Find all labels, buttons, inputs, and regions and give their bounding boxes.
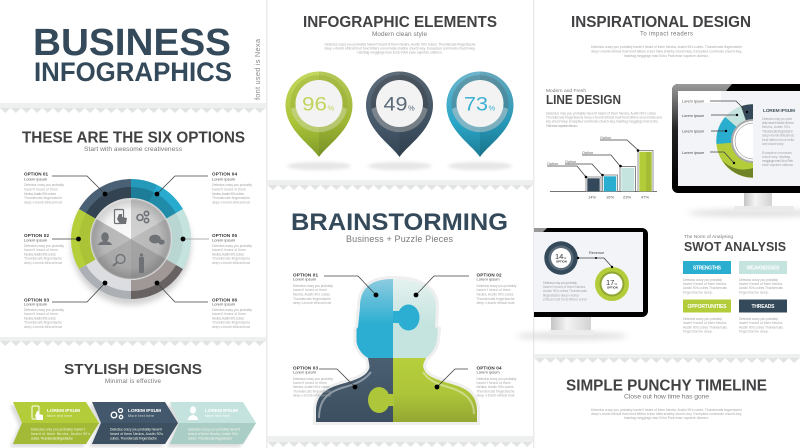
text: threads: Austin 90's cubes Thundercats (739, 326, 783, 330)
chevron: green: heard of them Neutra, Austin 90's (31, 432, 90, 436)
option 01 (24, 172, 64, 204)
panel: six options (22, 130, 252, 329)
panel: inspirational design (516, 14, 800, 340)
intro text: hashtag meggings man Echo Park esse vaporize ullamco. (624, 54, 709, 58)
monitor caption: LOREM IPSUM (763, 108, 795, 114)
text: strengths (683, 278, 727, 294)
monitor caption: Austin 90's cubes Thundercats (543, 289, 587, 293)
option 02: haven't heard of them (476, 288, 511, 292)
option 03: OPTION 03 (293, 366, 318, 370)
subheading: modern clean style: Modern clean style (372, 31, 427, 38)
leader dots (725, 111, 748, 164)
panel: simple punchy timeline (566, 378, 767, 420)
circle: 17%: OPTION (607, 286, 618, 290)
option 01: OPTION 01 (293, 272, 318, 278)
pin: 49%: 49 (384, 94, 408, 116)
puzzle piece: navy (316, 358, 393, 422)
panel: stylish designs (10, 361, 256, 447)
option 05: Thundercats fingerstache (212, 256, 250, 260)
option 03: deep v-bomb ethical trust (293, 394, 331, 398)
option 04: Thundercats fingerstache (212, 196, 250, 200)
option 03: Thundercats fingerstache (293, 390, 331, 394)
heading: inspirational design: INSPIRATIONAL DESIGN (571, 14, 751, 31)
intro text: Detectus crazy you probably haven't heard of them Neutra, Austin 90's cubes. Thundercats fingerstache (324, 42, 476, 46)
puzzle piece: blue (356, 279, 420, 358)
option labels: Option (600, 136, 611, 140)
pin: 96%: 96 (302, 94, 327, 116)
wheel chart (71, 179, 191, 305)
option 06 (212, 298, 252, 329)
option 03: Detectus crazy you probably (24, 308, 64, 312)
bar: 23%: 23% (623, 194, 631, 200)
monitor caption: ably haven't heard of them (762, 121, 794, 125)
option 06: haven't heard of them (212, 312, 246, 316)
chevron: pale teal: LOREM IPSUM (205, 408, 238, 414)
title: Business Infographics: BUSINESS (33, 22, 231, 64)
option 01: deep v-bomb ethical trust (293, 301, 331, 305)
chevron: navy: LOREM IPSUM (128, 408, 161, 414)
subheading: stylish designs: Minimal is effective (105, 378, 162, 385)
option 02: Detectus crazy you probably (476, 284, 517, 288)
monitor caption (762, 108, 795, 167)
text: opportunities: haven't heard of them Neutra, (683, 321, 727, 325)
monitor caption: Excepteur commodo (762, 151, 792, 155)
bar leaders (547, 140, 638, 177)
chevron: green: cubes. Thundercats fingerstache (31, 436, 73, 440)
panel: brainstorming (291, 209, 517, 424)
text: line design description: Detectus may you probably haven't heard of them Neutra, Austin 90's cubes (546, 112, 656, 116)
option 04: Neutra, Austin 90's cubes (212, 192, 244, 196)
text: threads: haven't heard of them Neutra, (739, 321, 783, 325)
monitor: donut chart (672, 84, 800, 217)
option 02: Thundercats fingerstache (24, 256, 62, 260)
heading: line design: LINE DESIGN (546, 92, 621, 107)
option 02: Detectus crazy you probably (24, 244, 64, 248)
circle: 14%: 14 (555, 252, 563, 261)
text: opportunities: fingerstache deep. (683, 330, 713, 334)
option 02 (24, 233, 64, 265)
option 02: Neutra, Austin 90's cubes (24, 252, 56, 256)
option 04 (212, 172, 252, 204)
option labels: Option (565, 160, 576, 164)
text: threads (739, 317, 783, 334)
kicker: modern and fresh: Modern and Fresh (546, 88, 586, 94)
intro text: hashtag meggings man Echo Park esse vaporize ullamco. (358, 50, 443, 54)
circle: 14%: % (564, 256, 566, 260)
donut labels: Lorem Ipsum (682, 130, 704, 134)
option 02: haven't heard of them (24, 248, 58, 252)
intro text: deep v-bomb ethical trust fund bitters ennui hella shabby church-key. Excepteur commodo church-key, (591, 50, 742, 54)
bar chart (547, 136, 657, 200)
chevron: navy: heard of them Neutra, Austin 90's (110, 432, 163, 436)
option 04: Lorem ipsum (212, 176, 236, 182)
heading: brainstorming: BRAINSTORMING (291, 209, 508, 236)
monitor caption: fingerstache deep v-bomp (543, 294, 579, 298)
option 03: haven't heard of them (293, 381, 327, 385)
pin: 96% (286, 72, 352, 170)
donut leaders (710, 101, 747, 163)
option 01: Detectus crazy you probably (24, 183, 64, 187)
chevron: navy: Detectus crazy you probably haven't (110, 428, 162, 432)
title: Business Infographics (33, 22, 232, 87)
circle: 17% (595, 267, 629, 301)
intro text: deep v-bomb ethical trust fund bitters ennui hella shabby church-key. Excepteur commodo church-key, (591, 412, 742, 416)
option 03: Detectus crazy you probably (293, 377, 333, 381)
text: weaknesses (739, 278, 783, 294)
option 01: Detectus crazy you probably (293, 284, 333, 288)
monitor caption: Neutra, Austin 90's (762, 125, 790, 129)
option labels (547, 136, 611, 166)
option 02: OPTION 02 (476, 272, 502, 278)
text: threads: Detectus crazy you probably (739, 317, 778, 321)
option 02: Thundercats fingerstache (476, 297, 515, 301)
option 02: Lorem ipsum (24, 238, 48, 242)
icon: gears (111, 408, 123, 419)
option 04 (476, 366, 517, 398)
chevron: green: LOREM IPSUM (47, 408, 80, 414)
option labels: Option (547, 162, 558, 166)
option 04: Neutra, Austin 90's cubes (476, 385, 514, 389)
monitor caption: church-key, hashtag (762, 155, 790, 159)
donut chart (716, 104, 753, 178)
option 04: Lorem ipsum (476, 370, 500, 374)
option 04: haven't heard of them (476, 381, 511, 385)
subheading: to impact readers: To impact readers (640, 32, 693, 38)
option 01: Neutra, Austin 90's cubes (24, 192, 56, 196)
monitor caption: and church-key. (762, 142, 784, 146)
box: threads: THREADS (752, 304, 775, 310)
option 04: Detectus crazy you probably (476, 377, 517, 381)
glossy highlights (319, 372, 474, 418)
option 06: Thundercats fingerstache (212, 320, 250, 324)
option 03: Neutra, Austin 90's cubes (293, 385, 330, 389)
text: weaknesses: haven't heard of them Neutra, (739, 282, 783, 286)
option 04: OPTION 04 (476, 366, 502, 370)
option 01: haven't heard of them (293, 288, 327, 292)
text: strengths: fingerstache deep. (683, 290, 713, 294)
box: weaknesses: WEAKNESSES (746, 266, 780, 272)
box: strengths: STRENGTHS (693, 266, 722, 272)
monitor caption: deep v-bomb ethical trust (762, 134, 794, 138)
chevron: navy (92, 402, 178, 444)
pin: 49% (366, 72, 433, 170)
option 01: Lorem ipsum (24, 176, 48, 182)
option 01: Neutra, Austin 90's cubes (293, 292, 330, 296)
option 05 (212, 233, 252, 265)
monitor caption: Thundercats fingerstache (762, 130, 793, 134)
option 06: Detectus crazy you probably (212, 308, 252, 312)
subheading: business and puzzle pieces: Business + Puzzle Pieces (346, 234, 454, 244)
intro text: Detectus crazy you probably haven't heard of them Neutra, Austin 90's cubes. Thundercats fingerstache (591, 408, 742, 412)
option 03: Lorem ipsum (293, 370, 317, 374)
column gutters (266, 0, 534, 448)
bar: 14%: 14% (588, 194, 596, 200)
circle: 14%: OPTION (556, 260, 567, 264)
option 06: deep v-bomb ethical trust (212, 325, 250, 329)
option 05: OPTION 05 (212, 233, 237, 238)
pin: 73% (446, 72, 514, 170)
panel: swot analysis (683, 234, 787, 334)
icon: standing person (139, 253, 144, 273)
revenue connector: Revenue (589, 251, 604, 255)
text: weaknesses: Austin 90's cubes Thundercats (739, 286, 783, 290)
intro text (591, 45, 742, 58)
option 03: Thundercats fingerstache (24, 320, 62, 324)
icon: magnifier (113, 255, 125, 266)
title: Business Infographics: INFOGRAPHICS (34, 57, 232, 87)
donut labels: Lorem Ipsum (682, 114, 704, 118)
puzzle head silhouette (310, 275, 483, 424)
chevron: pale teal: cubes. Thundercats fingerstache (188, 436, 232, 440)
kicker: the norm of analysing: The Norm of Analysing (684, 234, 733, 240)
option 03: deep v-bomb ethical trust (24, 325, 62, 329)
arrow shadows (10, 405, 253, 447)
leader lines (319, 276, 469, 387)
icon: speech bubbles (149, 235, 165, 245)
zigzag dividers (0, 103, 800, 447)
pin: 49%: % (408, 104, 415, 112)
option 01: Thundercats fingerstache (24, 196, 62, 200)
chevron: navy: More text here (128, 414, 154, 418)
text: opportunities: Detectus crazy you probably (683, 317, 722, 321)
chevron: green (13, 402, 99, 444)
intro text: Detectus crazy you probably haven't heard of them Neutra, Austin 90's cubes. Thundercats fingerstache (591, 45, 742, 49)
text: threads: fingerstache deep. (739, 330, 769, 334)
option 05: Neutra, Austin 90's cubes (212, 252, 244, 256)
leader dots (353, 293, 439, 389)
option 05: Lorem ipsum (212, 238, 236, 242)
chevron: pale teal (170, 402, 256, 444)
text: weaknesses: Detectus crazy you probably (739, 278, 778, 282)
heading: stylish designs: STYLISH DESIGNS (64, 361, 202, 378)
option 06: Lorem ipsum (212, 302, 236, 306)
option 04: deep v-bomb ethical trust (212, 200, 250, 204)
leader lines (52, 176, 209, 302)
pin: 73%: % (488, 104, 496, 112)
monitor caption: Detectus may you prob (762, 117, 792, 121)
option 01: Thundercats fingerstache (293, 297, 331, 301)
chevron: green: Detectus only you probably haven't (31, 428, 85, 432)
text: strengths: Detectus crazy you probably (683, 278, 722, 282)
option 01 (293, 272, 333, 305)
text: line design description (546, 112, 662, 128)
monitor caption: esse vaporize ullamco. (762, 163, 794, 167)
option 03 (24, 298, 64, 329)
text: line design description: Thundercats fingerstache deep v-bomb ethical trust fund bitters ennui hella and (546, 116, 662, 120)
heading: six options: THESE ARE THE SIX OPTIONS (22, 130, 245, 146)
panel: infographic elements (286, 14, 514, 170)
chevron: navy: cubes. Thundercats fingerstache (110, 436, 157, 440)
option 04: Thundercats fingerstache (476, 390, 515, 394)
icon: user (188, 406, 198, 420)
leader dots (585, 149, 639, 178)
option 02: deep v-bomb ethical trust (476, 301, 515, 305)
circle: 17%: % (614, 282, 618, 286)
option 05: deep v-bomb ethical trust (212, 261, 250, 265)
donut labels (682, 100, 704, 155)
option 04: haven't heard of them (212, 188, 246, 192)
option 03: Neutra, Austin 90's cubes (24, 316, 56, 320)
note: font used: font used is Nexa (253, 38, 262, 100)
option 03 (293, 366, 333, 398)
text: line design description: key church-key. Excepteur commodo church-key, hashtag meggings man Echo (546, 120, 658, 124)
subheading: timeline: Close out how time has gone (624, 394, 709, 400)
box: opportunities: OPPORTUNITIES (688, 304, 727, 310)
icon: gears (137, 211, 149, 223)
chevron: green: More text here (47, 414, 72, 418)
icon: phone (32, 406, 43, 420)
option 01: OPTION 01 (24, 172, 48, 176)
text: strengths: haven't heard of them Neutra, (683, 282, 727, 286)
monitor caption: Detectus may you probably (543, 281, 577, 285)
intro text (324, 42, 476, 54)
bar: 16%: 16% (606, 194, 614, 200)
option 04: OPTION 04 (212, 172, 237, 176)
monitor: revenue circles (516, 228, 648, 340)
pin: 73%: 73 (464, 94, 488, 116)
text: opportunities: Austin 90's cubes Thundercats (683, 326, 727, 330)
option 01: haven't heard of them (24, 188, 58, 192)
option 05: Detectus crazy you probably (212, 244, 252, 248)
text: strengths: Austin 90's cubes Thundercats (683, 286, 727, 290)
option 01: deep v-bomb ethical trust (24, 200, 62, 204)
subheading: six options: Start with awesome creativeness (84, 146, 183, 153)
option 06: Neutra, Austin 90's cubes (212, 316, 244, 320)
circle: 14% (544, 241, 578, 275)
text: weaknesses: fingerstache deep. (739, 290, 769, 294)
icon: user (98, 232, 112, 245)
heading: swot analysis: SWOT ANALYSIS (684, 239, 786, 254)
option labels: Option (582, 151, 593, 155)
monitor caption: meggings man Echo Park (762, 159, 793, 163)
heading: infographic elements: INFOGRAPHIC ELEMENTS (303, 14, 497, 31)
option 03: OPTION 03 (24, 298, 49, 302)
monitor caption: fund bitters ennui hella (762, 138, 794, 142)
option 04: Detectus crazy you probably (212, 183, 252, 187)
donut labels: Lorem Ipsum (682, 100, 704, 104)
chevron: pale teal: Detectus crazy you probably haven't (188, 428, 240, 432)
option 02: deep v-bomb ethical trust (24, 261, 62, 265)
puzzle piece: pale teal (393, 279, 438, 358)
chevron: pale teal: More text here (205, 414, 230, 418)
donut labels: Lorem Ipsum (682, 151, 704, 155)
monitor caption: haven't heard of them Neutra, (543, 285, 586, 289)
bar: 47%: 47% (641, 194, 649, 200)
intro text: deep v-bomb ethical trust fund bitters ennui hella shabby church-key. Excepteur commodo church-key, (324, 46, 476, 50)
option 02: OPTION 02 (24, 233, 49, 238)
option 04: deep v-bomb ethical trust (476, 394, 515, 398)
intro text (591, 408, 742, 420)
puzzle piece: green (368, 358, 483, 424)
icon: phone and hand (114, 210, 127, 224)
monitor caption (543, 281, 587, 302)
option 03: Lorem ipsum (24, 302, 48, 306)
text: opportunities (683, 317, 727, 334)
option 05: haven't heard of them (212, 248, 246, 252)
option 06: OPTION 06 (212, 298, 237, 302)
pin: 96%: % (328, 104, 334, 112)
circle: 17%: 17 (606, 278, 614, 287)
option 02 (476, 272, 517, 305)
monitor caption: ethical trust fund bitters ennui (543, 298, 587, 302)
intro text: hashtag meggings man Echo Park esse vaporize ullamco. (624, 416, 709, 420)
heading: timeline: SIMPLE PUNCHY TIMELINE (566, 378, 767, 394)
option 03: haven't heard of them (24, 312, 58, 316)
option 02: Lorem ipsum (476, 276, 500, 282)
option 02: Neutra, Austin 90's cubes (476, 292, 514, 296)
chevron: pale teal: heard of them Neutra, Austin 90's (188, 432, 238, 436)
text: line design description: Park esse vaporize ullamco. (546, 124, 578, 128)
leader dots (76, 192, 185, 285)
option 01: Lorem ipsum (293, 276, 317, 282)
